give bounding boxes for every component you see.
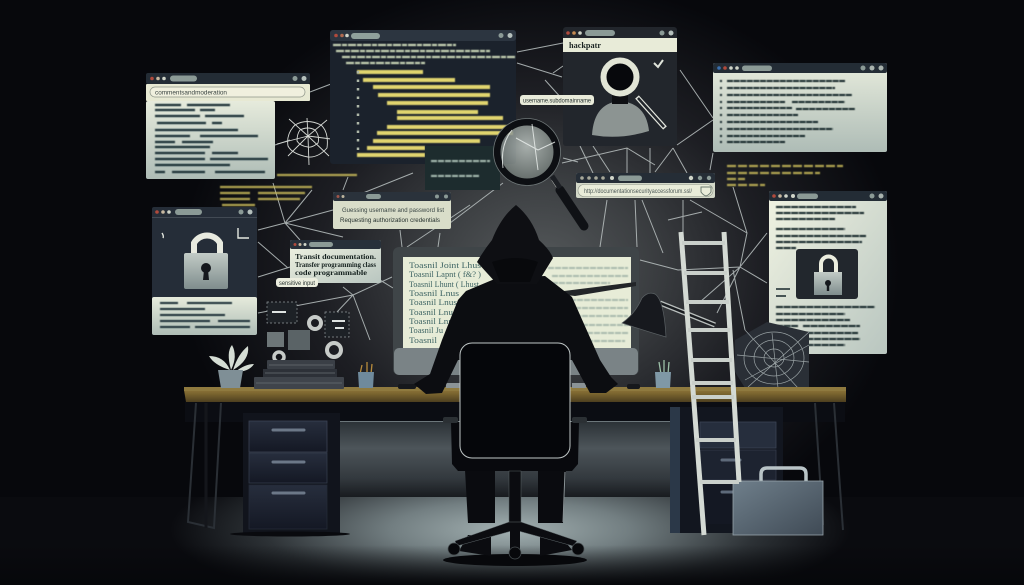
right drawer unit: [670, 407, 783, 533]
icon: user silhouette with magnifier: [592, 60, 665, 137]
screen text: Toasnil Lhunt ( Lhust: [409, 279, 480, 289]
legs: [465, 470, 566, 523]
tag: sensitive input: sensitive input: [279, 281, 315, 287]
right desk legs: [815, 403, 843, 530]
desk lamp: [622, 293, 715, 337]
window: warning dialog: code programmable: [295, 269, 367, 277]
screen text: Toasnil Joint Lhus: [409, 260, 481, 270]
yellow log text: [220, 166, 843, 205]
screen text: Toasnil Lnus: [409, 297, 457, 307]
spider web box: [735, 322, 809, 388]
address text: commentsandmoderation: [155, 90, 227, 96]
window: right list: [713, 63, 887, 152]
spider web threads: [258, 43, 767, 340]
icon: dark panel padlock: [796, 249, 858, 299]
window: right lock document: [769, 191, 887, 354]
screen text: Toasnil: [409, 335, 438, 345]
address text: http://documentationsecurityaccessforum.ssl/: [584, 188, 692, 195]
icon: padlock: [184, 235, 228, 289]
window: warning dialog: Transfer programming class: [295, 261, 376, 269]
gears and circuit parts: [267, 302, 349, 362]
ladder: [681, 232, 739, 535]
screen text: Toasnil Lnus: [409, 288, 459, 298]
torso and arms: [414, 276, 618, 394]
screen text: [409, 260, 481, 345]
window: address bar: [576, 173, 715, 198]
dialog text: Guessing username and password list: [342, 207, 444, 214]
plant: [209, 345, 254, 388]
window: code editor: [330, 30, 516, 190]
icon: shield: [701, 187, 711, 196]
window: profile: [563, 27, 677, 146]
tag: username: username.subdomainname: [523, 98, 591, 104]
hood: [477, 205, 553, 284]
pencil cup left: [358, 362, 374, 388]
floor: [0, 497, 1024, 585]
tag: username: [520, 95, 594, 105]
hooded hacker: [414, 205, 618, 556]
dialog text: Transit documentation.: [295, 253, 376, 261]
keyboard and mouse: [398, 383, 640, 389]
window title: hackpatr: [569, 40, 601, 50]
desk back shadow: [185, 402, 845, 422]
desktop monitor: [393, 247, 639, 375]
office chair: [443, 343, 587, 559]
briefcase: [733, 468, 823, 535]
screen text: Toasnil Lnu: [409, 316, 454, 326]
shoes: [459, 535, 572, 556]
floor shadow: [443, 554, 587, 566]
magnifying glass: [494, 118, 584, 227]
desktop: [184, 387, 846, 402]
pencil cup right: [655, 360, 671, 388]
window: left lock: [152, 207, 257, 335]
screen text: Toasnil Lnu: [409, 307, 454, 317]
window: warning dialog: [290, 240, 381, 283]
left desk legs: [188, 403, 221, 528]
icon: spider web: [277, 118, 331, 165]
window: left notes: [146, 73, 310, 179]
left drawer unit: [230, 413, 350, 536]
book stack: [254, 360, 344, 389]
tag: sensitive input: [276, 278, 318, 287]
screen text: Toasnil Ju: [409, 325, 444, 335]
window: search dialog: Requesting authorization credentials: [340, 217, 441, 224]
icon: check mark: [654, 60, 663, 67]
window: search dialog: [333, 192, 451, 229]
screen text: Toasnil Lapnt ( f&? ): [409, 269, 481, 279]
back wall under desk: [340, 421, 670, 497]
